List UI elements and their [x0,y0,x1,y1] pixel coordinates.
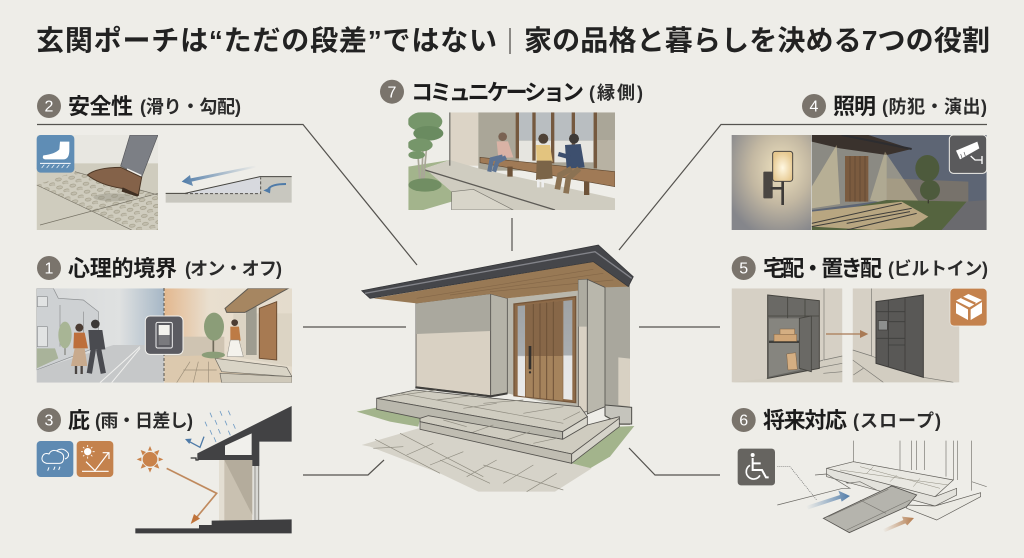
illustration: ramp at porch [777,441,987,533]
arrow: slope direction [182,166,257,186]
illustration: people on engawa bench [407,112,615,210]
heading 5 [732,256,988,281]
tree [915,155,940,203]
heading 2: 安全性 [68,94,133,119]
heading 1: (オン・オフ) [185,259,282,279]
heading 6 [732,408,941,433]
heading 1: 心理的境界 [68,256,177,281]
illustration: night porch [812,135,987,230]
icon: wheelchair [738,449,775,485]
tree [407,112,443,192]
heading 2 [37,94,241,119]
illustration: shoe on tactile paving [37,135,158,230]
icon: slip foot [37,135,74,173]
arrow: to built-in locker [826,330,868,338]
panel 6: future slope [732,408,987,533]
panel 1: psychological boundary [37,256,292,383]
woman seated left [489,132,513,172]
couple walking [71,320,105,374]
heading 3 [37,408,193,433]
section diagram: eaves, rain and sun [135,406,292,533]
rain [205,411,235,442]
tree [202,313,225,358]
panel 2: safety [37,94,292,230]
heading 2: (滑り・勾配) [140,96,241,117]
heading 7: (縁側) [589,83,643,103]
icon: light switch [145,316,183,354]
title: 家の品格と暮らしを決める7つの役割 [524,25,990,56]
illustration: wall lamp [732,135,811,230]
heading 7: コミュニケーション [411,80,584,105]
panel 7: communication [380,80,643,210]
arrow: wheelchair approach [806,491,850,509]
woman seated centre [536,134,553,187]
arrow: sunlight reflection [167,468,217,524]
icon: parcel [950,288,987,326]
heading 7: 7 [388,84,397,102]
heading 5: (ビルトイン) [888,258,988,279]
heading 1: 1 [45,260,54,278]
heading 4: 照明 [833,94,876,119]
boundary line [163,288,165,383]
heading 3: 3 [45,412,54,430]
man seated right [557,134,585,193]
title [36,25,990,56]
illustration: open locker [732,288,842,382]
heading 4: 4 [810,98,819,116]
heading 7 [380,80,643,105]
illustration: street to home [37,288,292,383]
heading 6: 将来対応 [763,408,847,433]
woman at door [227,319,243,357]
heading 2: 2 [45,98,54,116]
heading 1 [37,256,282,281]
heading 5: 5 [739,260,748,278]
icon: rain [37,441,73,477]
heading 6: 6 [739,412,748,430]
heading 4: (防犯・演出) [882,97,987,117]
title: 玄関ポーチは“ただの段差”ではない [36,25,497,56]
arrow: rain deflection [185,437,204,447]
sun [137,446,163,473]
heading 4 [802,94,987,119]
icon: security camera [949,135,987,173]
connector lines [37,124,987,475]
heading 3: 庇 [68,408,90,433]
heading 6: (スロープ) [853,411,941,431]
panel 3: eaves [37,406,292,533]
heading 3: (雨・日差し) [95,411,193,431]
parcels [774,329,797,370]
heading 5: 宅配・置き配 [763,256,882,281]
panel 4: lighting [732,94,987,230]
illustration: closed locker [853,288,959,382]
arrow: ramp direction [883,517,914,532]
icon: sun reflection [77,441,113,477]
central illustration: entrance porch [357,245,634,492]
diagram: gentle slope [166,166,292,203]
arrow: drainage [268,184,286,189]
panel 5: delivery box [732,256,988,382]
